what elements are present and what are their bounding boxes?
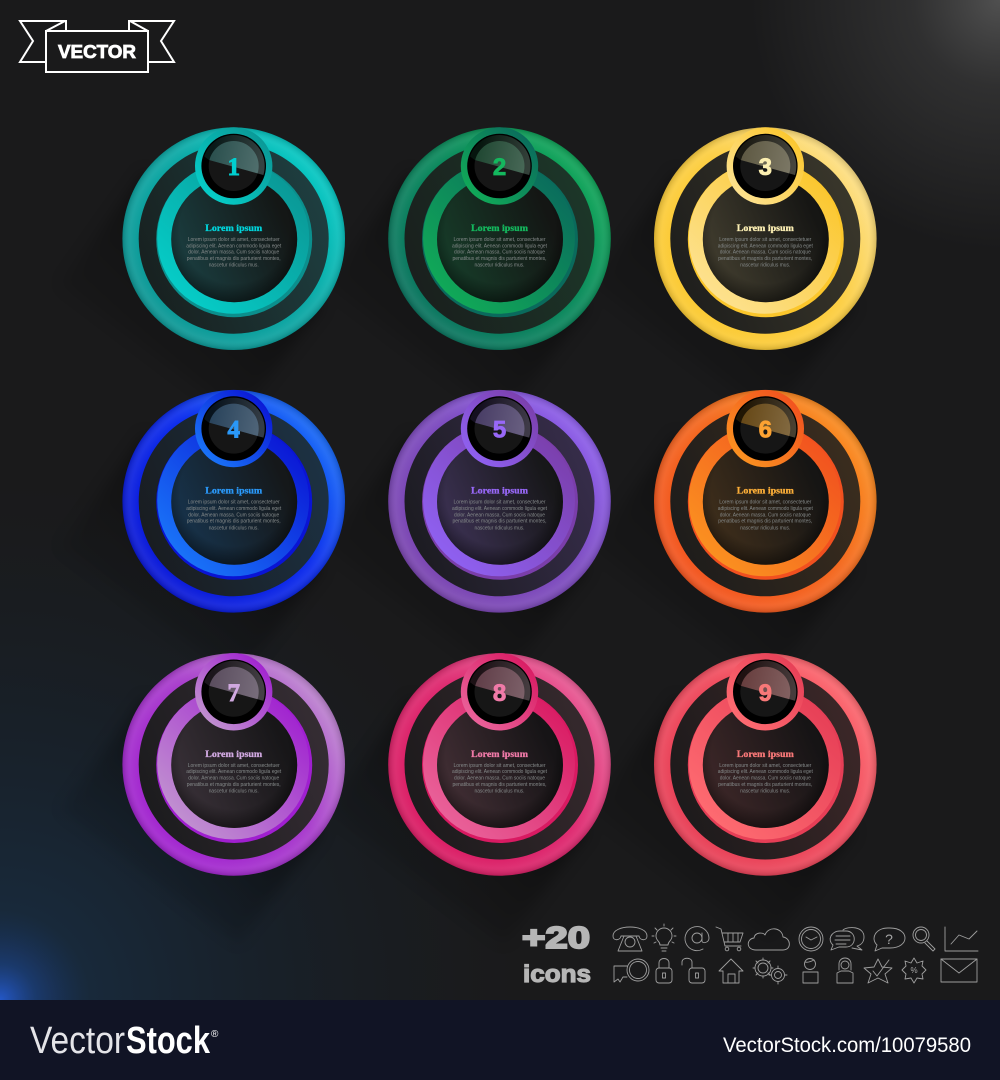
body text: dolor. Aenean massa. Cum sociis natoque	[720, 512, 811, 518]
badge: VECTOR ribbon	[20, 21, 174, 72]
body text: penatibus et magnis dis parturient montes,	[452, 256, 547, 262]
icon: gears	[753, 958, 787, 984]
body text: penatibus et magnis dis parturient montes,	[718, 519, 813, 525]
icon: woman	[837, 958, 853, 983]
body text	[186, 500, 282, 531]
body text: dolor. Aenean massa. Cum sociis natoque	[188, 250, 279, 256]
icon: envelope	[941, 959, 977, 982]
logo: VectorStock	[30, 1020, 211, 1062]
icon: question bubble	[874, 928, 905, 951]
body text: dolor. Aenean massa. Cum sociis natoque	[188, 776, 279, 782]
icon: house	[719, 959, 743, 983]
panel: circle 9	[654, 653, 877, 876]
logo: VectorStock: Stock	[126, 1020, 211, 1062]
body text: penatibus et magnis dis parturient montes,	[452, 519, 547, 525]
number 2: 2	[493, 154, 506, 181]
icon: line chart	[945, 927, 978, 951]
number 7: 7	[227, 680, 240, 707]
body text: dolor. Aenean massa. Cum sociis natoque	[188, 512, 279, 518]
panel: circle 7	[122, 653, 345, 876]
body text	[186, 763, 282, 794]
heading: Lorem ipsum	[205, 750, 262, 760]
body text: Lorem ipsum dolor sit amet, consectetuer	[454, 763, 546, 769]
body text: nascetur ridiculus mus.	[740, 788, 790, 794]
icon: star with check	[864, 959, 892, 983]
icon: telephone	[613, 927, 647, 951]
body text: penatibus et magnis dis parturient montes,	[718, 782, 813, 788]
panel: circle 2	[388, 127, 611, 350]
icon: key	[614, 959, 649, 982]
body text: penatibus et magnis dis parturient montes,	[187, 519, 281, 525]
body text: nascetur ridiculus mus.	[474, 525, 524, 531]
icon: light bulb	[652, 924, 676, 951]
body text: dolor. Aenean massa. Cum sociis natoque	[454, 250, 545, 256]
body text: adipiscing elit. Aenean commodo ligula eget	[718, 506, 813, 512]
body text: nascetur ridiculus mus.	[209, 525, 259, 531]
body text: adipiscing elit. Aenean commodo ligula eget	[452, 769, 547, 775]
panel: circle 1	[122, 127, 345, 350]
body text: nascetur ridiculus mus.	[740, 525, 790, 531]
+20 icons label: +20	[522, 920, 590, 955]
icon: closed lock	[656, 958, 672, 983]
body text: Lorem ipsum dolor sit amet, consectetuer	[188, 500, 280, 506]
number 1: 1	[227, 154, 240, 181]
body text	[718, 500, 813, 531]
body text: Lorem ipsum dolor sit amet, consectetuer	[188, 237, 280, 243]
heading: Lorem ipsum	[737, 224, 794, 234]
body text	[186, 237, 282, 269]
body text: dolor. Aenean massa. Cum sociis natoque	[454, 776, 545, 782]
number 8: 8	[493, 680, 506, 707]
icon: shopping cart	[716, 927, 743, 951]
body text	[718, 237, 813, 269]
body text	[452, 763, 547, 794]
icon set	[613, 924, 978, 984]
body text: nascetur ridiculus mus.	[209, 788, 259, 794]
heading: Lorem ipsum	[471, 487, 528, 497]
number 9: 9	[759, 680, 772, 707]
body text: adipiscing elit. Aenean commodo ligula eget	[186, 506, 282, 512]
icon: percent burst	[902, 958, 926, 983]
number 5: 5	[493, 417, 506, 444]
body text: penatibus et magnis dis parturient montes,	[718, 256, 813, 262]
body text: nascetur ridiculus mus.	[209, 263, 259, 269]
body text: penatibus et magnis dis parturient montes,	[187, 782, 281, 788]
heading: Lorem ipsum	[471, 224, 528, 234]
body text: Lorem ipsum dolor sit amet, consectetuer	[188, 763, 280, 769]
icon: open lock	[682, 958, 705, 983]
image id: VectorStock.com/10079580	[723, 1033, 971, 1057]
body text: adipiscing elit. Aenean commodo ligula eget	[718, 243, 813, 249]
heading: Lorem ipsum	[737, 750, 794, 760]
footer band	[0, 1000, 1000, 1080]
panel: circle 6	[654, 390, 877, 613]
number 6: 6	[759, 417, 772, 444]
body text: Lorem ipsum dolor sit amet, consectetuer	[454, 500, 546, 506]
badge: VECTOR ribbon: VECTOR	[58, 42, 136, 62]
panel: circle 8	[388, 653, 611, 876]
number 4: 4	[227, 417, 240, 444]
logo: VectorStock: Vector	[30, 1020, 125, 1062]
panel: circle 5	[388, 390, 611, 613]
body text: adipiscing elit. Aenean commodo ligula eget	[452, 243, 547, 249]
body text: nascetur ridiculus mus.	[740, 263, 790, 269]
body text: dolor. Aenean massa. Cum sociis natoque	[454, 512, 545, 518]
panel: circle 4	[122, 390, 345, 613]
body text: dolor. Aenean massa. Cum sociis natoque	[720, 250, 811, 256]
panel: circle 3	[654, 127, 877, 350]
body text: adipiscing elit. Aenean commodo ligula eget	[186, 769, 282, 775]
body text: nascetur ridiculus mus.	[474, 263, 524, 269]
icon: magnifier	[913, 927, 935, 951]
icon: cloud	[748, 929, 789, 950]
body text	[452, 500, 547, 531]
icon: question bubble: ?	[885, 931, 893, 947]
icon: at sign	[685, 927, 709, 951]
number 3: 3	[759, 154, 772, 181]
icon: clock	[799, 927, 823, 951]
body text: adipiscing elit. Aenean commodo ligula eget	[186, 243, 282, 249]
icon: man	[803, 958, 818, 983]
+20 icons label	[522, 920, 591, 988]
heading: Lorem ipsum	[471, 750, 528, 760]
body text: penatibus et magnis dis parturient montes,	[187, 256, 281, 262]
icon: speech bubbles	[830, 928, 864, 950]
body text: adipiscing elit. Aenean commodo ligula eget	[452, 506, 547, 512]
+20 icons label: icons	[523, 961, 591, 988]
body text	[452, 237, 547, 269]
body text: penatibus et magnis dis parturient montes,	[452, 782, 547, 788]
heading: Lorem ipsum	[737, 487, 794, 497]
heading: Lorem ipsum	[205, 487, 262, 497]
body text: Lorem ipsum dolor sit amet, consectetuer	[719, 500, 811, 506]
body text: Lorem ipsum dolor sit amet, consectetuer	[719, 763, 811, 769]
body text: adipiscing elit. Aenean commodo ligula eget	[718, 769, 813, 775]
heading: Lorem ipsum	[205, 224, 262, 234]
registered mark: ®	[211, 1029, 219, 1040]
body text: nascetur ridiculus mus.	[474, 788, 524, 794]
body text: Lorem ipsum dolor sit amet, consectetuer	[719, 237, 811, 243]
body text	[718, 763, 813, 794]
body text: dolor. Aenean massa. Cum sociis natoque	[720, 776, 811, 782]
icon: percent burst: %	[910, 966, 918, 975]
body text: Lorem ipsum dolor sit amet, consectetuer	[454, 237, 546, 243]
